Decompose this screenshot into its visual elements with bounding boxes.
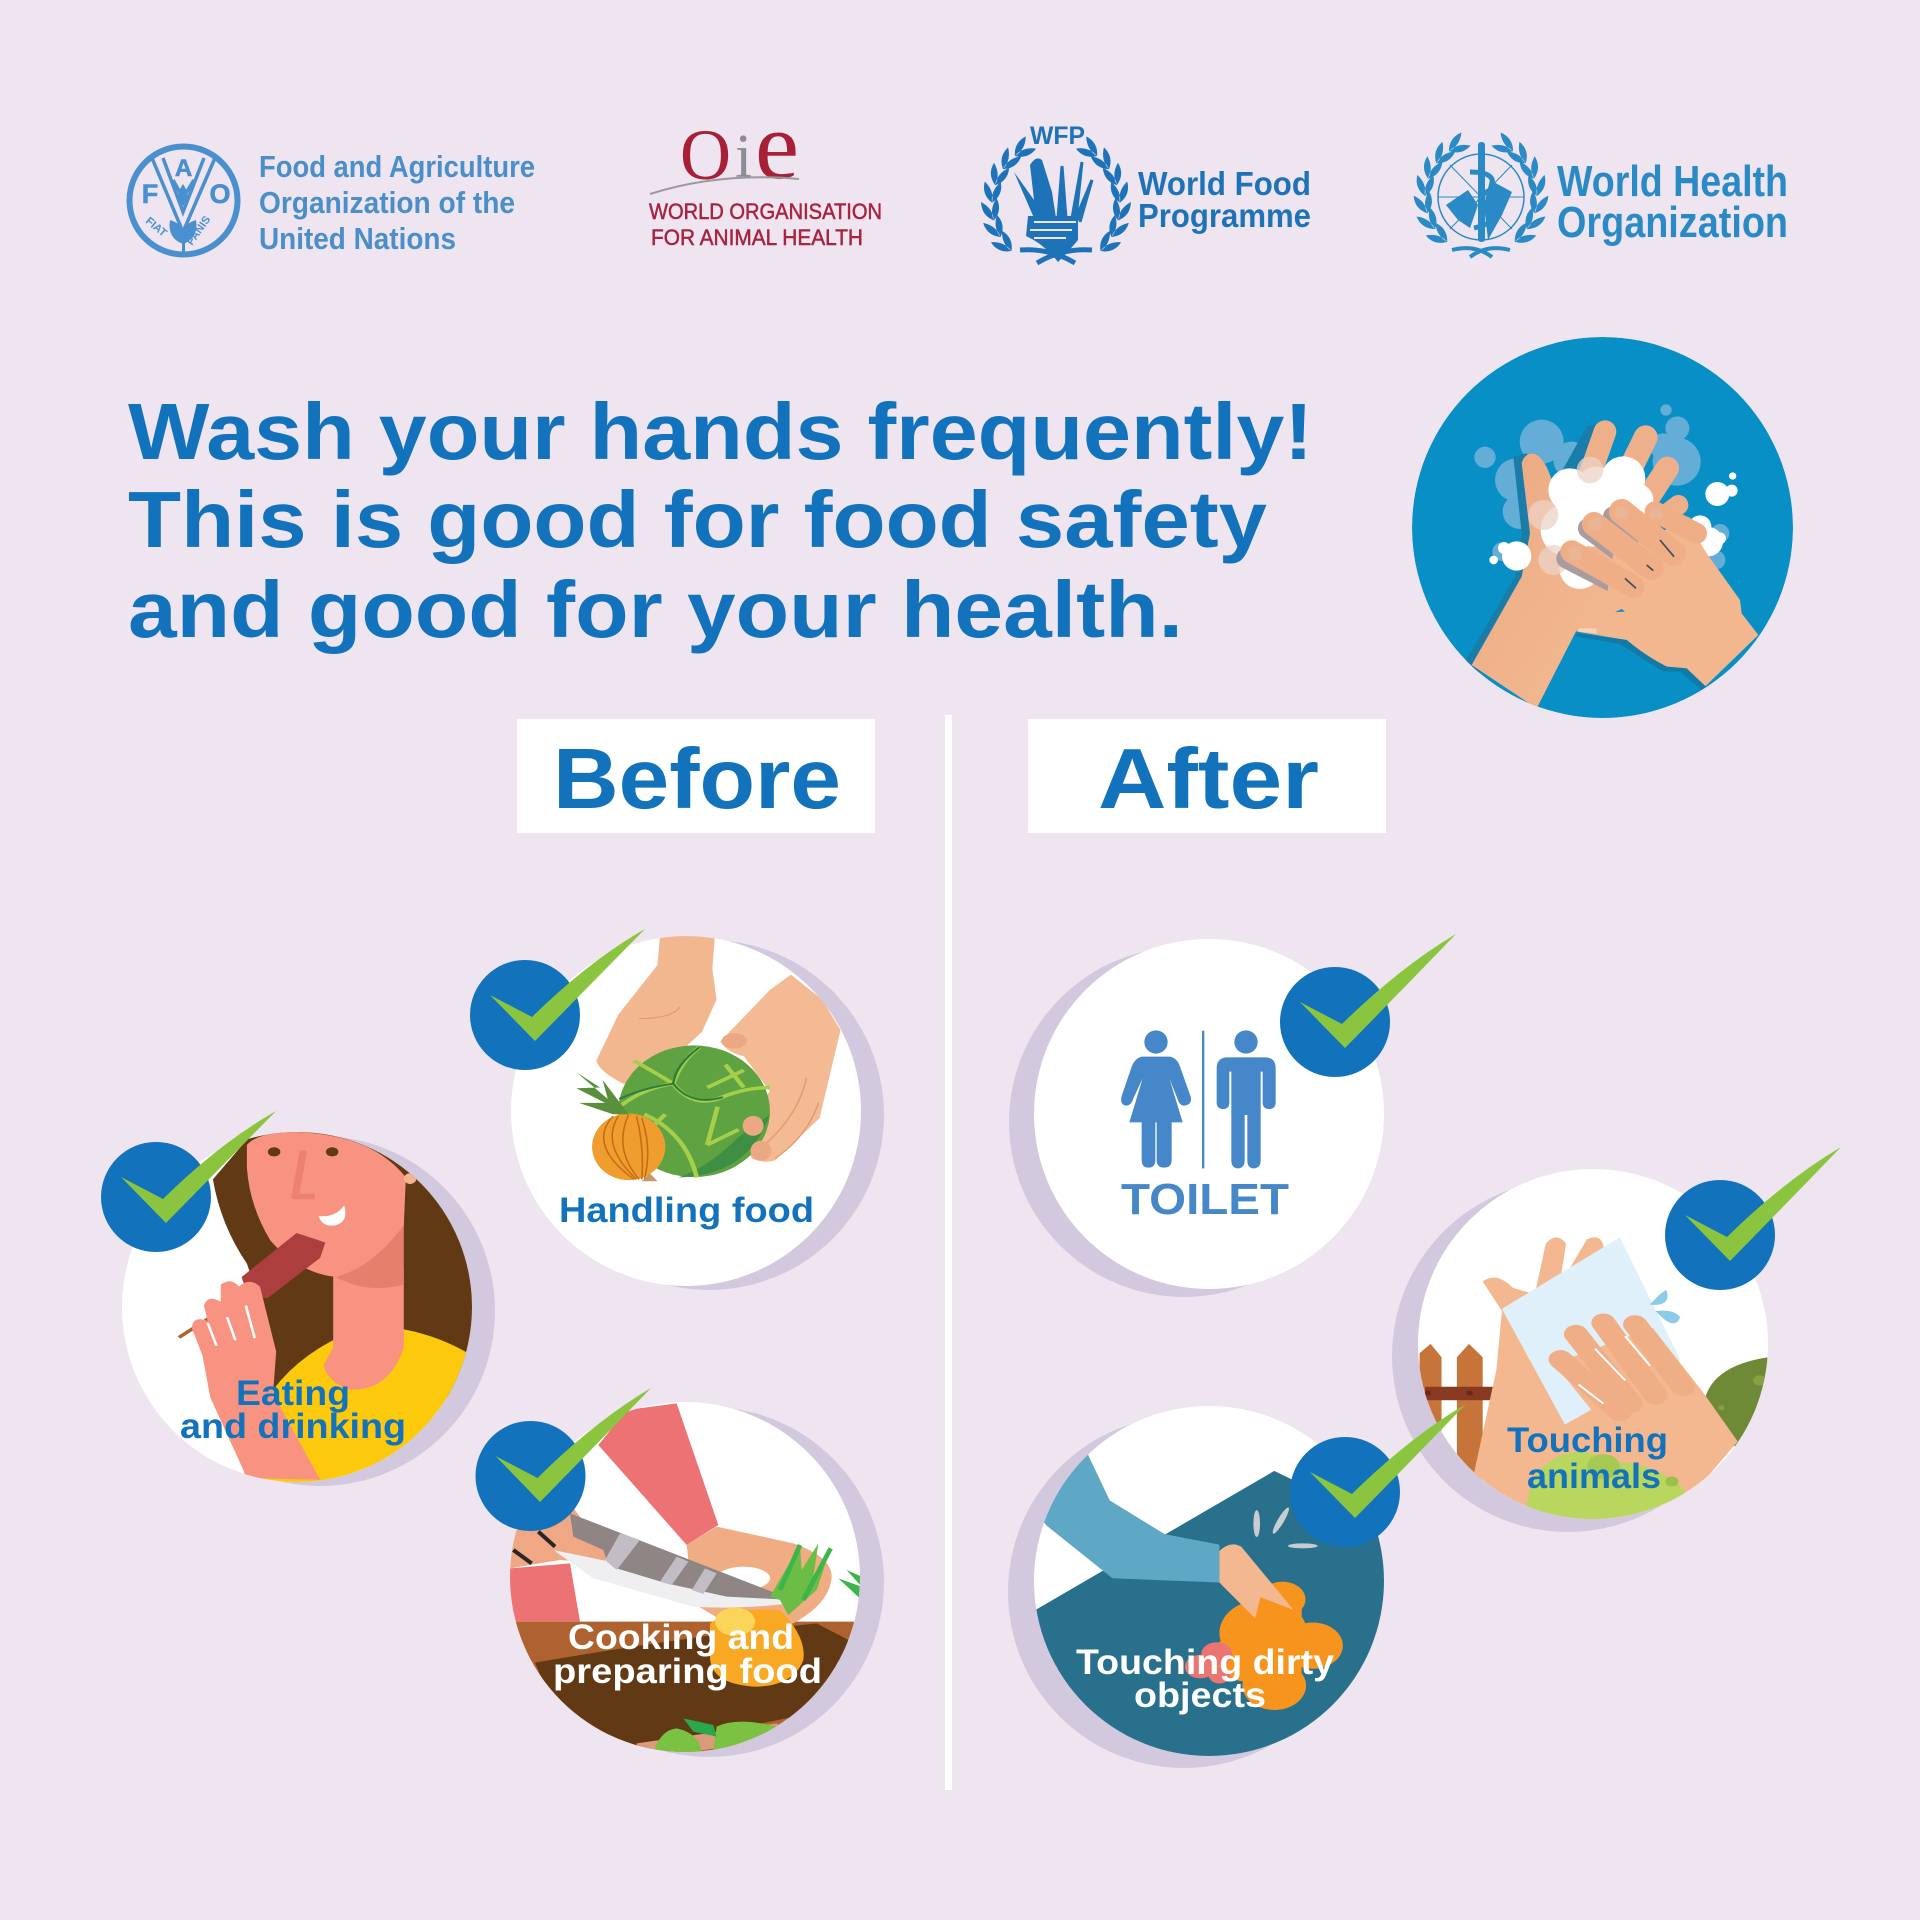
panel: Handling food (470, 929, 884, 1290)
icon: WFP wreath (980, 136, 1132, 263)
illustration: hand touching dirty object (1036, 1454, 1384, 1756)
check mark (476, 1388, 651, 1531)
label: Eating (236, 1374, 350, 1413)
WFP name: World Food (1138, 165, 1311, 202)
OIE name: WORLD ORGANISATION (649, 199, 882, 224)
label: animals (1527, 1457, 1661, 1496)
hand and arm (192, 1281, 320, 1480)
icon: FAO emblem: A (175, 155, 192, 182)
icon: WHO emblem (1413, 132, 1549, 257)
logo: WFP (980, 122, 1311, 263)
title (128, 387, 1313, 654)
label: TOILET (1121, 1175, 1289, 1224)
shirt (244, 1329, 466, 1482)
FAO name (259, 149, 535, 256)
FAO name: United Nations (259, 221, 456, 256)
icon: hands washing with soap (1412, 337, 1793, 718)
logo: OIE (649, 92, 882, 250)
panel: After header: After (1098, 732, 1319, 827)
logo: WFP: Programme (1138, 197, 1311, 234)
check mark (1290, 1404, 1466, 1547)
neck (324, 1267, 404, 1390)
panel: After header (1028, 719, 1386, 833)
panel: Touching animals (1392, 1147, 1841, 1551)
illustration: hands, cabbage, onion (576, 934, 841, 1181)
OIE wordmark: e (755, 92, 799, 199)
panel: Eating and drinking (101, 1111, 498, 1497)
icon: FAO emblem (130, 146, 238, 255)
FAO name: Organization of the (259, 185, 515, 220)
divider (945, 715, 952, 1790)
OIE name (649, 199, 882, 250)
face (247, 1132, 406, 1277)
panel: Touching dirty objects (1008, 1404, 1466, 1768)
onion (592, 1114, 665, 1180)
OIE name: FOR ANIMAL HEALTH (651, 225, 863, 250)
icon: FAO emblem: O (209, 179, 231, 209)
panel: Before header (517, 719, 875, 833)
title: Wash your hands frequently! (128, 387, 1313, 476)
icon: toilet figures (1121, 1030, 1276, 1169)
label: and drinking (180, 1407, 406, 1446)
label: Handling food (559, 1191, 814, 1230)
cabbage (618, 1045, 770, 1177)
panel: Toilet (1009, 934, 1456, 1297)
OIE wordmark: i (735, 123, 752, 191)
water drops (1650, 1290, 1680, 1323)
popsicle (178, 1318, 208, 1339)
OIE wordmark: O (680, 115, 731, 195)
illustration: drying hands, fence, bushes (1420, 1237, 1768, 1519)
logo: WHO (1413, 132, 1788, 257)
front hand (1567, 507, 1758, 690)
front hand (1548, 1323, 1738, 1509)
check mark (101, 1111, 276, 1252)
label (1076, 1643, 1335, 1715)
logo: FAO (130, 146, 535, 256)
bushes (1526, 1452, 1686, 1519)
panel: Before header: Before (553, 732, 841, 827)
check mark (470, 929, 645, 1070)
back hand shadow (1465, 423, 1600, 673)
tissue (1502, 1237, 1680, 1425)
illustration: girl eating popsicle (178, 1132, 472, 1482)
label: Cooking and (568, 1618, 794, 1657)
illustration: knife, hands, food (500, 1403, 870, 1770)
back hand (1474, 1237, 1608, 1519)
label: Touching dirty (1076, 1643, 1335, 1682)
label: Touching (1507, 1421, 1668, 1460)
foam (1489, 456, 1738, 589)
logo: WHO: Organization (1557, 198, 1788, 247)
label (1507, 1421, 1668, 1496)
label: preparing food (553, 1652, 822, 1691)
check mark (1280, 934, 1456, 1077)
title: and good for your health. (128, 565, 1183, 654)
FAO name: Food and Agriculture (259, 149, 535, 184)
back hand (1472, 432, 1678, 708)
label (180, 1374, 406, 1446)
panel: Cooking and preparing food (476, 1388, 884, 1770)
WFP letters: WFP (1030, 122, 1085, 150)
icon: FAO emblem: FIAT (143, 215, 169, 240)
label (553, 1618, 822, 1691)
WHO name: World Health (1557, 157, 1788, 206)
check mark (1665, 1147, 1841, 1290)
title: This is good for food safety (128, 475, 1268, 564)
OIE wordmark (680, 92, 799, 199)
icon: FAO emblem: F (142, 179, 158, 209)
icon: FAO emblem: PANIS (185, 214, 213, 248)
label: objects (1134, 1676, 1266, 1715)
